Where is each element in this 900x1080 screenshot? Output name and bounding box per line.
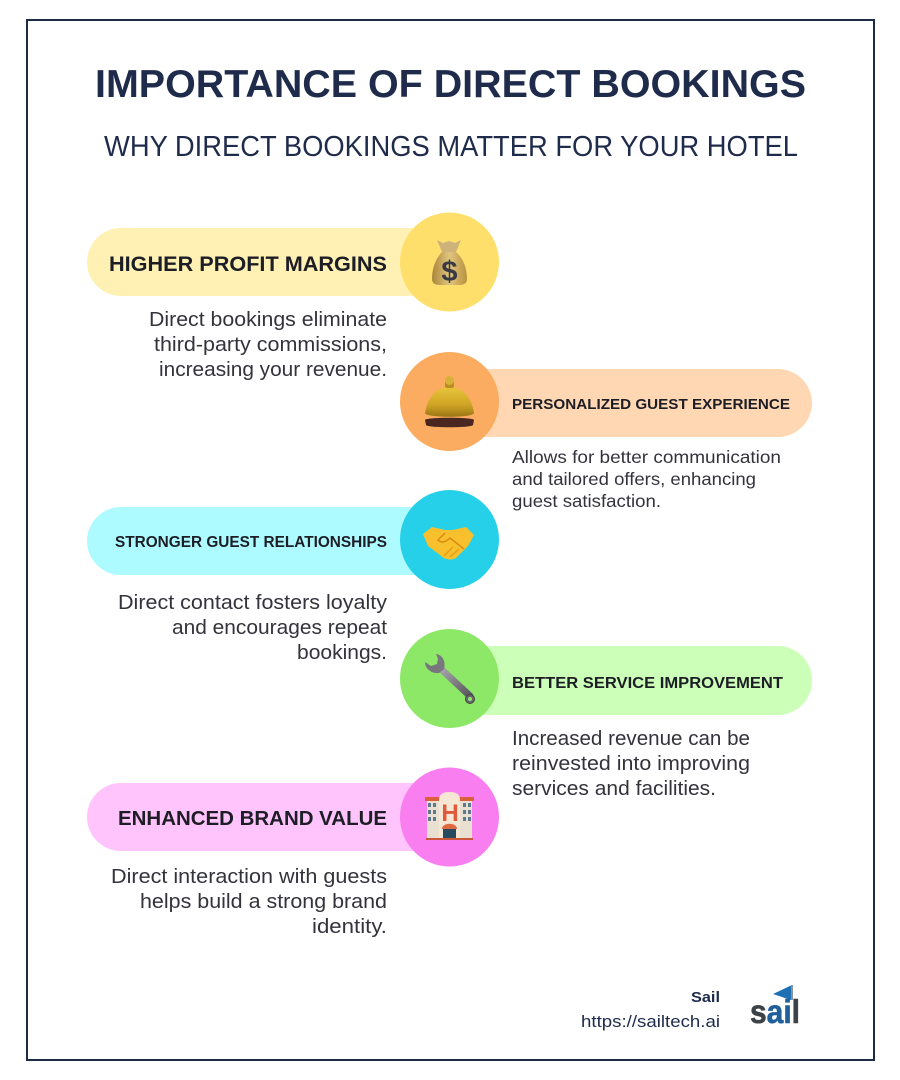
icon circle [400, 212, 499, 312]
description: increasing your revenue. [159, 358, 387, 381]
heading: ENHANCED BRAND VALUE [118, 807, 387, 830]
icon: handshake [423, 527, 474, 559]
description [111, 865, 387, 938]
heading: STRONGER GUEST RELATIONSHIPS [115, 534, 387, 551]
subtitle: WHY DIRECT BOOKINGS MATTER FOR YOUR HOTEL [104, 131, 798, 163]
footer [581, 985, 800, 1031]
description: Direct bookings eliminate [149, 308, 387, 331]
icon circle [400, 768, 499, 866]
icon: hotel: H [441, 800, 459, 827]
heading: BETTER SERVICE IMPROVEMENT [512, 675, 783, 692]
description: reinvested into improving [512, 753, 750, 775]
brand name: Sail [691, 989, 720, 1006]
description: Direct interaction with guests [111, 865, 387, 888]
description [512, 447, 781, 511]
panel: higher profit margins [87, 212, 499, 381]
heading: PERSONALIZED GUEST EXPERIENCE [512, 396, 790, 413]
heading pill [452, 646, 812, 715]
description [118, 591, 388, 664]
heading pill [452, 369, 812, 437]
description: Allows for better communication [512, 447, 781, 467]
description [512, 728, 750, 800]
description: third-party commissions, [154, 333, 387, 356]
heading pill [87, 228, 447, 296]
heading pill [87, 507, 447, 575]
logo: sail [750, 993, 800, 1030]
description: and encourages repeat [172, 616, 387, 639]
description: Increased revenue can be [512, 728, 750, 750]
panel: enhanced brand value [87, 768, 499, 938]
description: bookings. [297, 641, 387, 664]
panel: personalized guest experience [400, 352, 812, 511]
icon: money bag [432, 240, 467, 288]
description: identity. [312, 915, 387, 938]
heading pill [87, 783, 447, 851]
url: https://sailtech.ai [581, 1013, 720, 1031]
panel: stronger guest relationships [87, 490, 499, 664]
description: Direct contact fosters loyalty [118, 591, 388, 614]
panel: better service improvement [400, 629, 812, 800]
icon: hotel [425, 792, 474, 840]
icon circle [400, 490, 499, 589]
heading: HIGHER PROFIT MARGINS [109, 253, 387, 276]
description [149, 308, 387, 381]
title: IMPORTANCE OF DIRECT BOOKINGS [95, 63, 806, 106]
icon: money bag: $ [441, 256, 458, 288]
icon: wrench [425, 654, 474, 704]
description: and tailored offers, enhancing [512, 469, 756, 489]
icon: service bell [425, 376, 474, 427]
description: guest satisfaction. [512, 491, 661, 511]
icon circle [400, 352, 499, 451]
description: services and facilities. [512, 778, 716, 800]
description: helps build a strong brand [140, 890, 387, 913]
icon circle [400, 629, 499, 728]
